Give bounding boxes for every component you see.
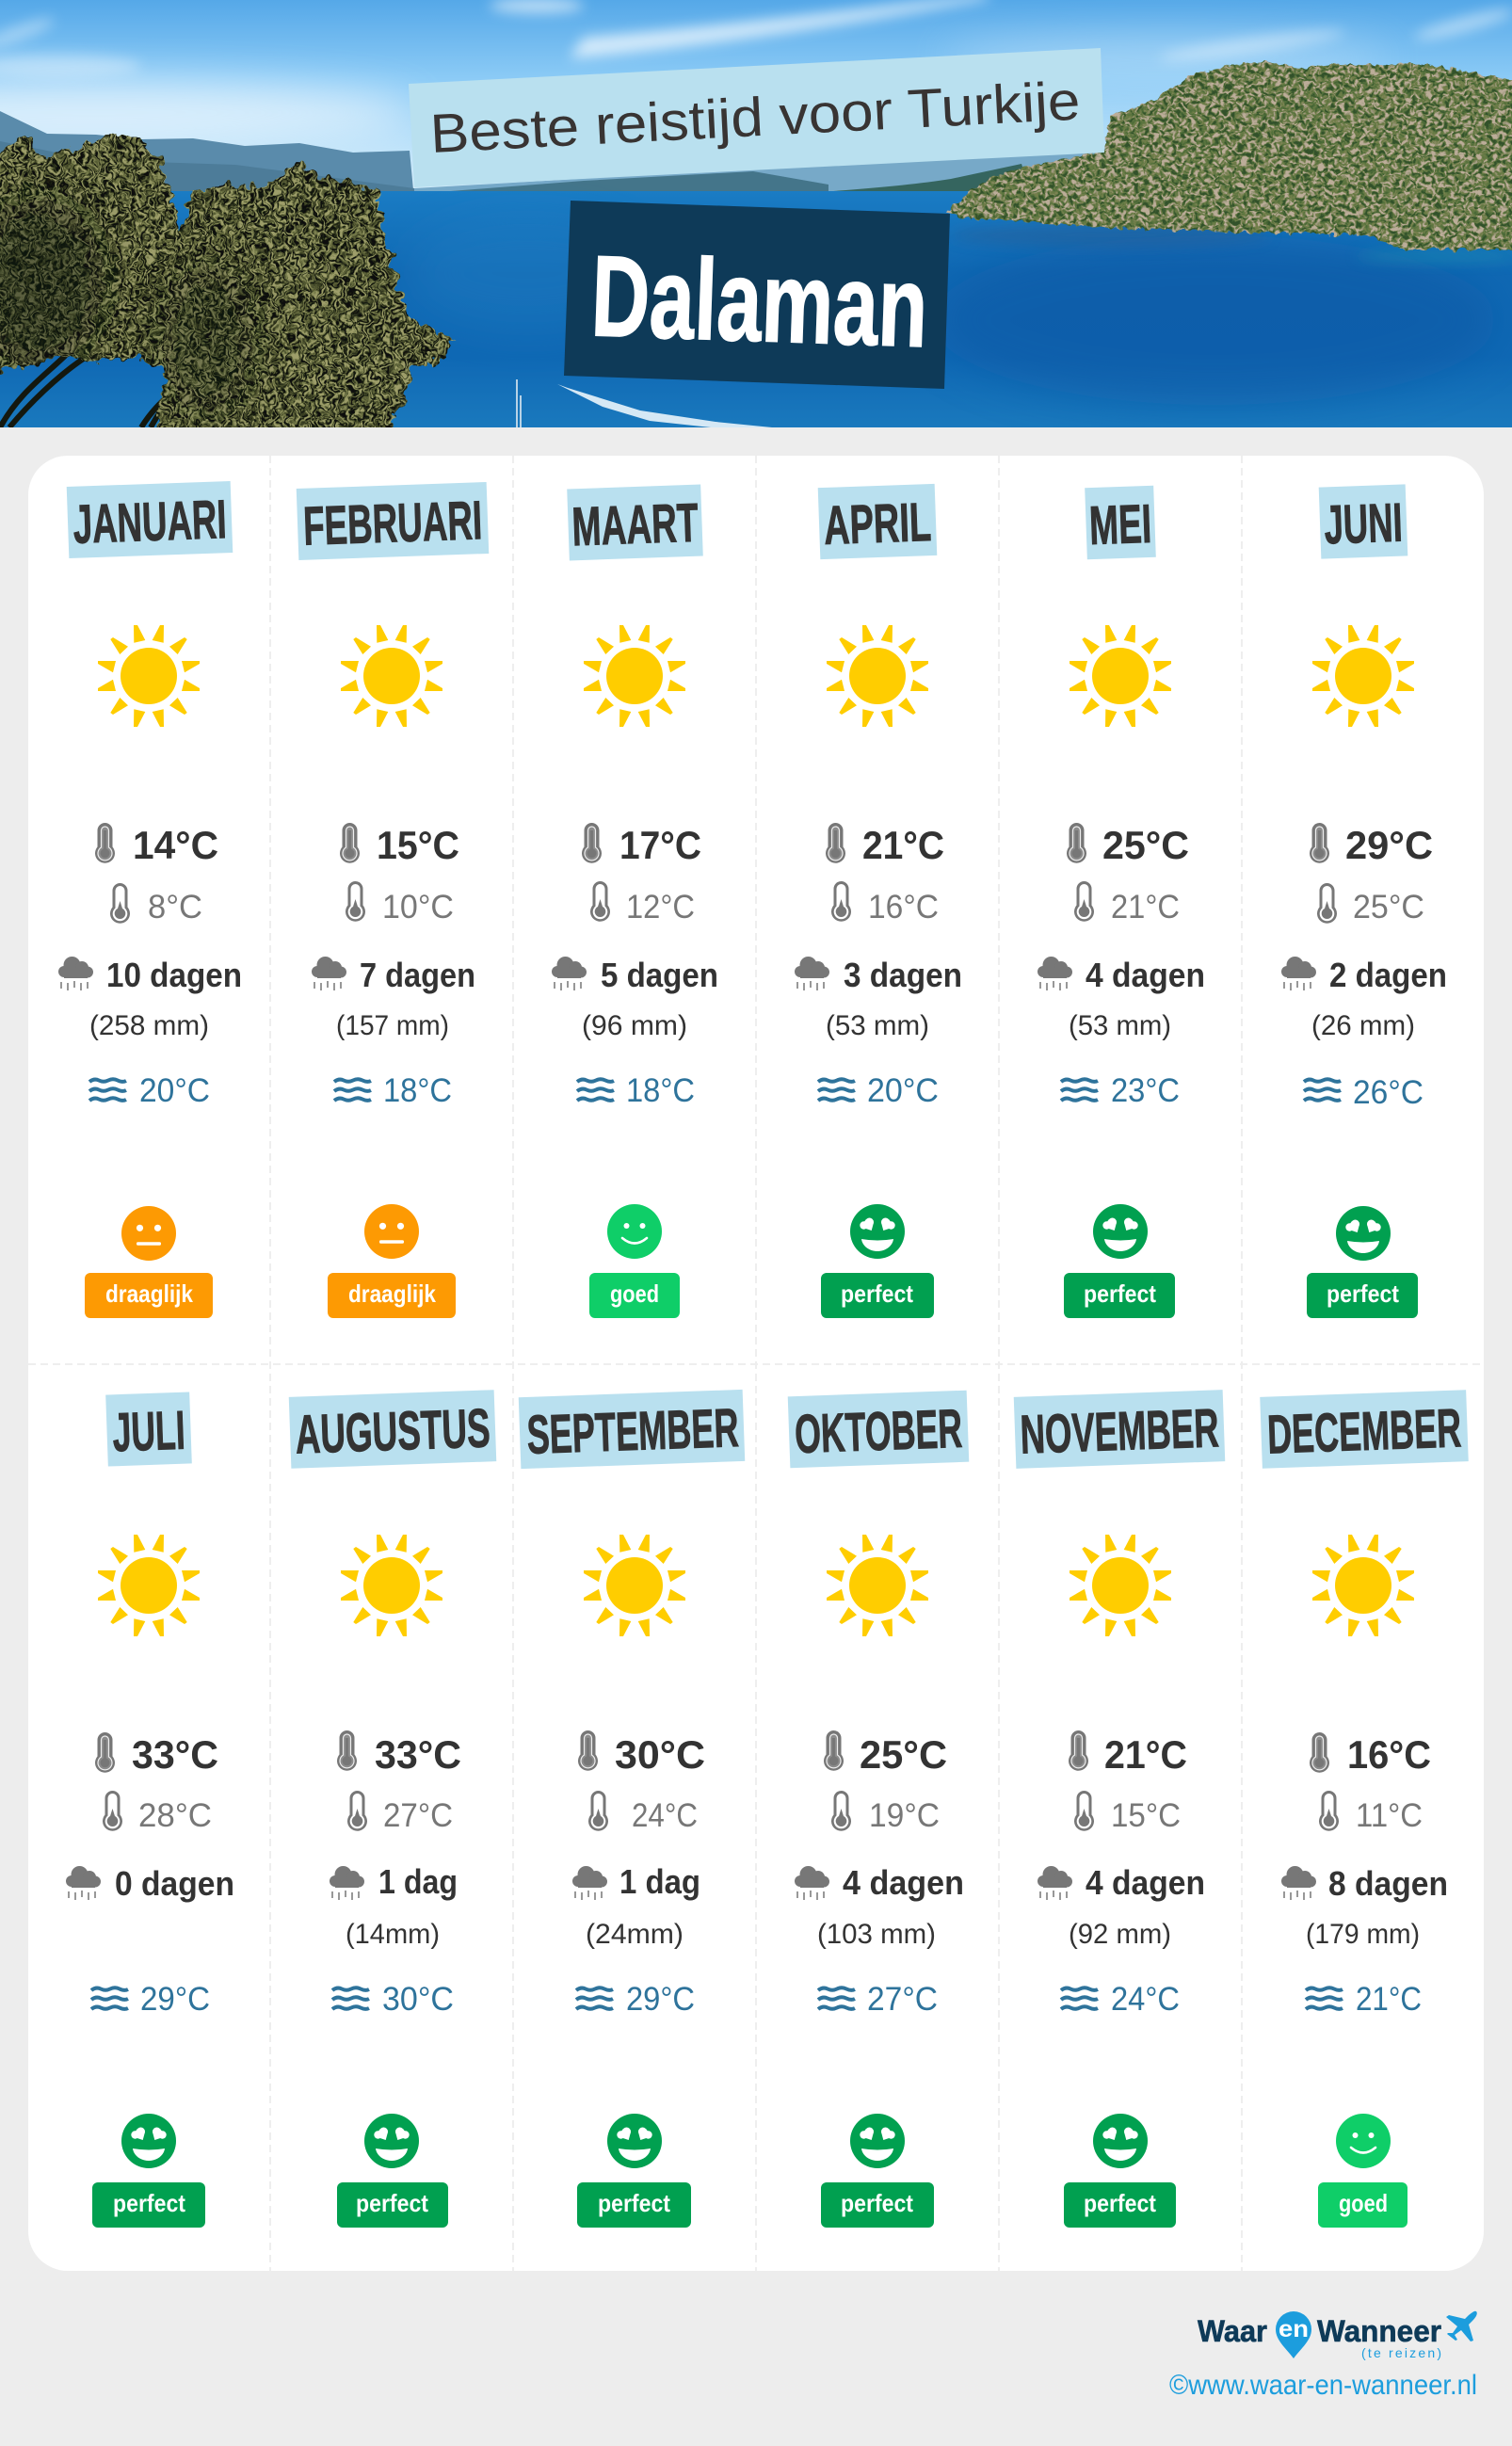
rain days: 3 dagen xyxy=(844,956,962,994)
heading: juni xyxy=(1319,484,1407,559)
heading: november xyxy=(1014,1390,1225,1469)
city banner: Dalaman xyxy=(589,232,930,371)
icon: low temperature xyxy=(590,881,610,922)
rainfall: (14mm) xyxy=(346,1919,440,1950)
high temperature: 25°C xyxy=(1102,823,1189,867)
icon: low temperature xyxy=(1074,881,1094,922)
water temperature: 18°C xyxy=(626,1072,695,1109)
heading: oktober: OKTOBER xyxy=(794,1398,963,1465)
verdict badge xyxy=(1064,2182,1176,2228)
icon: sun xyxy=(98,625,200,727)
rain days: 1 dag xyxy=(619,1862,700,1901)
panel: climate table card xyxy=(28,456,1484,2271)
icon: water xyxy=(91,1987,128,2009)
icon: high temperature xyxy=(1310,823,1329,863)
high temperature: 14°C xyxy=(133,823,218,867)
verdict badge: perfect xyxy=(841,2189,913,2217)
verdict badge xyxy=(1318,2182,1407,2228)
month: juni xyxy=(1281,484,1447,1318)
rainfall: (92 mm) xyxy=(1069,1919,1171,1950)
rain days: 1 dag xyxy=(378,1862,458,1901)
icon: rain xyxy=(66,1866,101,1900)
rainfall: (179 mm) xyxy=(1306,1919,1420,1950)
logo: Waar en Wanneer: (te reizen) xyxy=(1361,2345,1441,2360)
month: maart xyxy=(552,485,718,1318)
city banner xyxy=(564,201,950,389)
icon: sun xyxy=(1312,1535,1414,1636)
verdict badge: perfect xyxy=(356,2189,428,2217)
high temperature: 25°C xyxy=(860,1732,947,1777)
icon: smiling face xyxy=(1336,2114,1391,2168)
icon: rain xyxy=(330,1866,364,1900)
water temperature: 21°C xyxy=(1356,1981,1422,2018)
heading: april xyxy=(818,484,937,559)
verdict badge: draaglijk xyxy=(348,1279,436,1308)
rain days: 5 dagen xyxy=(601,956,718,994)
icon: low temperature xyxy=(1319,1791,1339,1831)
icon: sun xyxy=(1312,625,1414,727)
icon: neutral face xyxy=(121,1206,176,1261)
icon: high temperature xyxy=(95,1732,115,1773)
icon: airplane xyxy=(1446,2311,1477,2341)
high temperature: 16°C xyxy=(1347,1732,1431,1777)
icon: low temperature xyxy=(103,1791,122,1831)
rain days: 10 dagen xyxy=(106,956,242,994)
rain days: 7 dagen xyxy=(360,956,475,994)
icon: rain xyxy=(572,1866,607,1900)
icon: sun xyxy=(584,1535,685,1636)
verdict badge xyxy=(821,1273,934,1318)
rainfall: (96 mm) xyxy=(582,1010,687,1041)
water temperature: 18°C xyxy=(383,1072,452,1109)
heading: mei xyxy=(1085,486,1156,559)
icon: low temperature xyxy=(588,1791,608,1831)
icon: rain xyxy=(1037,957,1072,990)
icon: low temperature xyxy=(347,1791,367,1831)
verdict badge xyxy=(577,2182,691,2228)
high temperature: 33°C xyxy=(132,1732,218,1777)
icon: high temperature xyxy=(578,1730,598,1771)
icon: map pin: en xyxy=(1279,2316,1309,2342)
high temperature: 15°C xyxy=(377,823,459,867)
icon: water xyxy=(1061,1987,1098,2009)
low temperature: 11°C xyxy=(1356,1797,1423,1834)
water temperature: 26°C xyxy=(1353,1074,1424,1111)
heading: mei: MEI xyxy=(1088,493,1152,556)
high temperature: 21°C xyxy=(1104,1732,1187,1777)
high temperature: 21°C xyxy=(862,823,944,867)
icon: sun xyxy=(827,625,928,727)
water temperature: 20°C xyxy=(867,1072,939,1109)
icon: water xyxy=(577,1079,614,1101)
icon: smiling face xyxy=(607,1204,662,1259)
high temperature: 33°C xyxy=(375,1732,461,1777)
icon: rain xyxy=(795,957,829,990)
icon: high temperature xyxy=(1069,1730,1088,1771)
title banner: Beste reistijd voor Turkije xyxy=(428,71,1082,165)
low temperature: 12°C xyxy=(626,889,695,925)
icon: heart-eyes face xyxy=(364,2114,419,2168)
rainfall: (53 mm) xyxy=(826,1010,929,1041)
icon: heart-eyes face xyxy=(850,1204,905,1259)
rain days: 8 dagen xyxy=(1328,1864,1448,1903)
month: november xyxy=(1014,1390,1225,2228)
month: december xyxy=(1260,1390,1469,2228)
heading: juli: JULI xyxy=(111,1400,186,1463)
icon: water xyxy=(1306,1987,1343,2009)
icon: rain xyxy=(552,957,587,990)
icon: map pin xyxy=(1276,2311,1311,2358)
icon: heart-eyes face xyxy=(1093,1204,1148,1259)
verdict badge: perfect xyxy=(598,2189,670,2217)
icon: low temperature xyxy=(346,881,365,922)
icon: water xyxy=(818,1079,855,1101)
icon: heart-eyes face xyxy=(1093,2114,1148,2168)
low temperature: 24°C xyxy=(632,1797,698,1834)
water temperature: 27°C xyxy=(867,1981,938,2018)
verdict badge: perfect xyxy=(841,1279,913,1308)
verdict badge: draaglijk xyxy=(105,1279,193,1308)
rainfall: (24mm) xyxy=(586,1919,684,1950)
month: januari xyxy=(58,481,242,1318)
water temperature: 29°C xyxy=(140,1981,210,2018)
icon: heart-eyes face xyxy=(607,2114,662,2168)
heading: januari xyxy=(67,481,233,558)
icon: high temperature xyxy=(1310,1732,1329,1773)
icon: water xyxy=(1304,1079,1341,1101)
verdict badge xyxy=(92,2182,205,2228)
icon: heart-eyes face xyxy=(121,2114,176,2168)
icon: high temperature xyxy=(582,823,602,863)
icon: high temperature xyxy=(340,823,360,863)
verdict badge: perfect xyxy=(113,2189,185,2217)
verdict badge xyxy=(1064,1273,1175,1318)
water temperature: 30°C xyxy=(382,1981,454,2018)
icon: sun xyxy=(584,625,685,727)
icon: rain xyxy=(795,1866,829,1900)
verdict badge: perfect xyxy=(1084,2189,1156,2217)
icon: low temperature xyxy=(831,1791,851,1831)
icon: sun xyxy=(98,1535,200,1636)
verdict badge xyxy=(85,1273,213,1318)
icon: high temperature xyxy=(824,1730,844,1771)
heading: september xyxy=(519,1390,745,1469)
icon: water xyxy=(334,1079,371,1101)
heading: juni: JUNI xyxy=(1323,492,1404,555)
heading: november: NOVEMBER xyxy=(1020,1397,1220,1466)
icon: rain xyxy=(1281,957,1316,990)
icon: low temperature xyxy=(1317,883,1337,924)
rain days: 0 dagen xyxy=(115,1864,234,1903)
verdict badge xyxy=(821,2182,934,2228)
rain days: 4 dagen xyxy=(1086,1863,1205,1902)
title banner xyxy=(409,48,1104,187)
high temperature: 17°C xyxy=(619,823,701,867)
verdict badge: goed xyxy=(610,1279,659,1308)
icon: water xyxy=(818,1987,855,2009)
icon: sun xyxy=(827,1535,928,1636)
heading: oktober xyxy=(788,1391,969,1468)
heading: september: SEPTEMBER xyxy=(526,1397,740,1466)
low temperature: 19°C xyxy=(869,1797,940,1834)
month: februari xyxy=(297,482,489,1318)
verdict badge xyxy=(328,1273,456,1318)
icon: low temperature xyxy=(110,883,130,924)
icon: water xyxy=(332,1987,369,2009)
verdict badge: perfect xyxy=(1327,1279,1399,1308)
icon: sun xyxy=(1070,1535,1171,1636)
icon: rain xyxy=(312,957,346,990)
low temperature: 25°C xyxy=(1353,889,1424,925)
verdict badge: goed xyxy=(1339,2189,1388,2217)
rainfall: (26 mm) xyxy=(1311,1010,1415,1041)
water temperature: 29°C xyxy=(626,1981,695,2018)
low temperature: 21°C xyxy=(1111,889,1180,925)
heading: augustus: AUGUSTUS xyxy=(295,1397,491,1466)
verdict badge xyxy=(337,2182,448,2228)
verdict badge: perfect xyxy=(1084,1279,1156,1308)
logo: Waar en Wanneer xyxy=(1198,2311,1477,2360)
low temperature: 28°C xyxy=(138,1797,212,1834)
low temperature: 8°C xyxy=(148,889,202,925)
heading: maart xyxy=(567,485,703,560)
heading: februari xyxy=(297,482,489,560)
rainfall: (53 mm) xyxy=(1069,1010,1171,1041)
icon: low temperature xyxy=(1074,1791,1094,1831)
water temperature: 23°C xyxy=(1111,1072,1180,1109)
verdict badge xyxy=(1307,1273,1418,1318)
month: augustus xyxy=(289,1390,496,2228)
low temperature: 16°C xyxy=(868,889,939,925)
header photo: bay at Dalaman xyxy=(0,0,1512,443)
water temperature: 20°C xyxy=(139,1072,210,1109)
icon: water xyxy=(576,1987,613,2009)
rain days: 4 dagen xyxy=(1086,956,1205,994)
icon: sun xyxy=(1070,625,1171,727)
month: mei xyxy=(1037,486,1205,1318)
rainfall: (157 mm) xyxy=(336,1010,449,1041)
low temperature: 27°C xyxy=(383,1797,453,1834)
low temperature: 15°C xyxy=(1111,1797,1181,1834)
icon: rain xyxy=(1037,1866,1072,1900)
icon: sun xyxy=(341,1535,442,1636)
high temperature: 30°C xyxy=(615,1732,705,1777)
icon: neutral face xyxy=(364,1204,419,1259)
copyright url: ©www.waar-en-wanneer.nl xyxy=(1169,2370,1477,2401)
high temperature: 29°C xyxy=(1345,823,1433,867)
icon: heart-eyes face xyxy=(1336,1206,1391,1261)
icon: high temperature xyxy=(337,1730,357,1771)
icon: sun xyxy=(341,625,442,727)
icon: water xyxy=(1061,1079,1098,1101)
icon: high temperature xyxy=(95,823,115,863)
logo: Waar en Wanneer: Waar xyxy=(1198,2314,1267,2348)
heading: juli xyxy=(105,1392,192,1467)
icon: low temperature xyxy=(831,881,851,922)
icon: heart-eyes face xyxy=(850,2114,905,2168)
rainfall: (258 mm) xyxy=(89,1010,209,1041)
heading: april: APRIL xyxy=(823,491,932,556)
water temperature: 24°C xyxy=(1111,1981,1180,2018)
icon: rain xyxy=(58,957,93,990)
month: oktober xyxy=(788,1391,969,2228)
heading: maart: MAART xyxy=(571,492,700,557)
verdict badge xyxy=(589,1273,680,1318)
heading: februari: FEBRUARI xyxy=(302,490,483,557)
month: september xyxy=(519,1390,745,2228)
rain days: 4 dagen xyxy=(843,1863,964,1902)
month: april xyxy=(795,484,962,1318)
rainfall: (103 mm) xyxy=(817,1919,936,1950)
icon: high temperature xyxy=(826,823,845,863)
heading: augustus xyxy=(289,1390,496,1469)
rain days: 2 dagen xyxy=(1329,956,1447,994)
icon: high temperature xyxy=(1067,823,1086,863)
icon: water xyxy=(89,1079,126,1101)
month: juli xyxy=(66,1392,234,2228)
heading: januari: JANUARI xyxy=(72,489,228,555)
low temperature: 10°C xyxy=(382,889,454,925)
logo: Waar en Wanneer: Wanneer xyxy=(1317,2314,1441,2348)
icon: rain xyxy=(1281,1866,1316,1900)
